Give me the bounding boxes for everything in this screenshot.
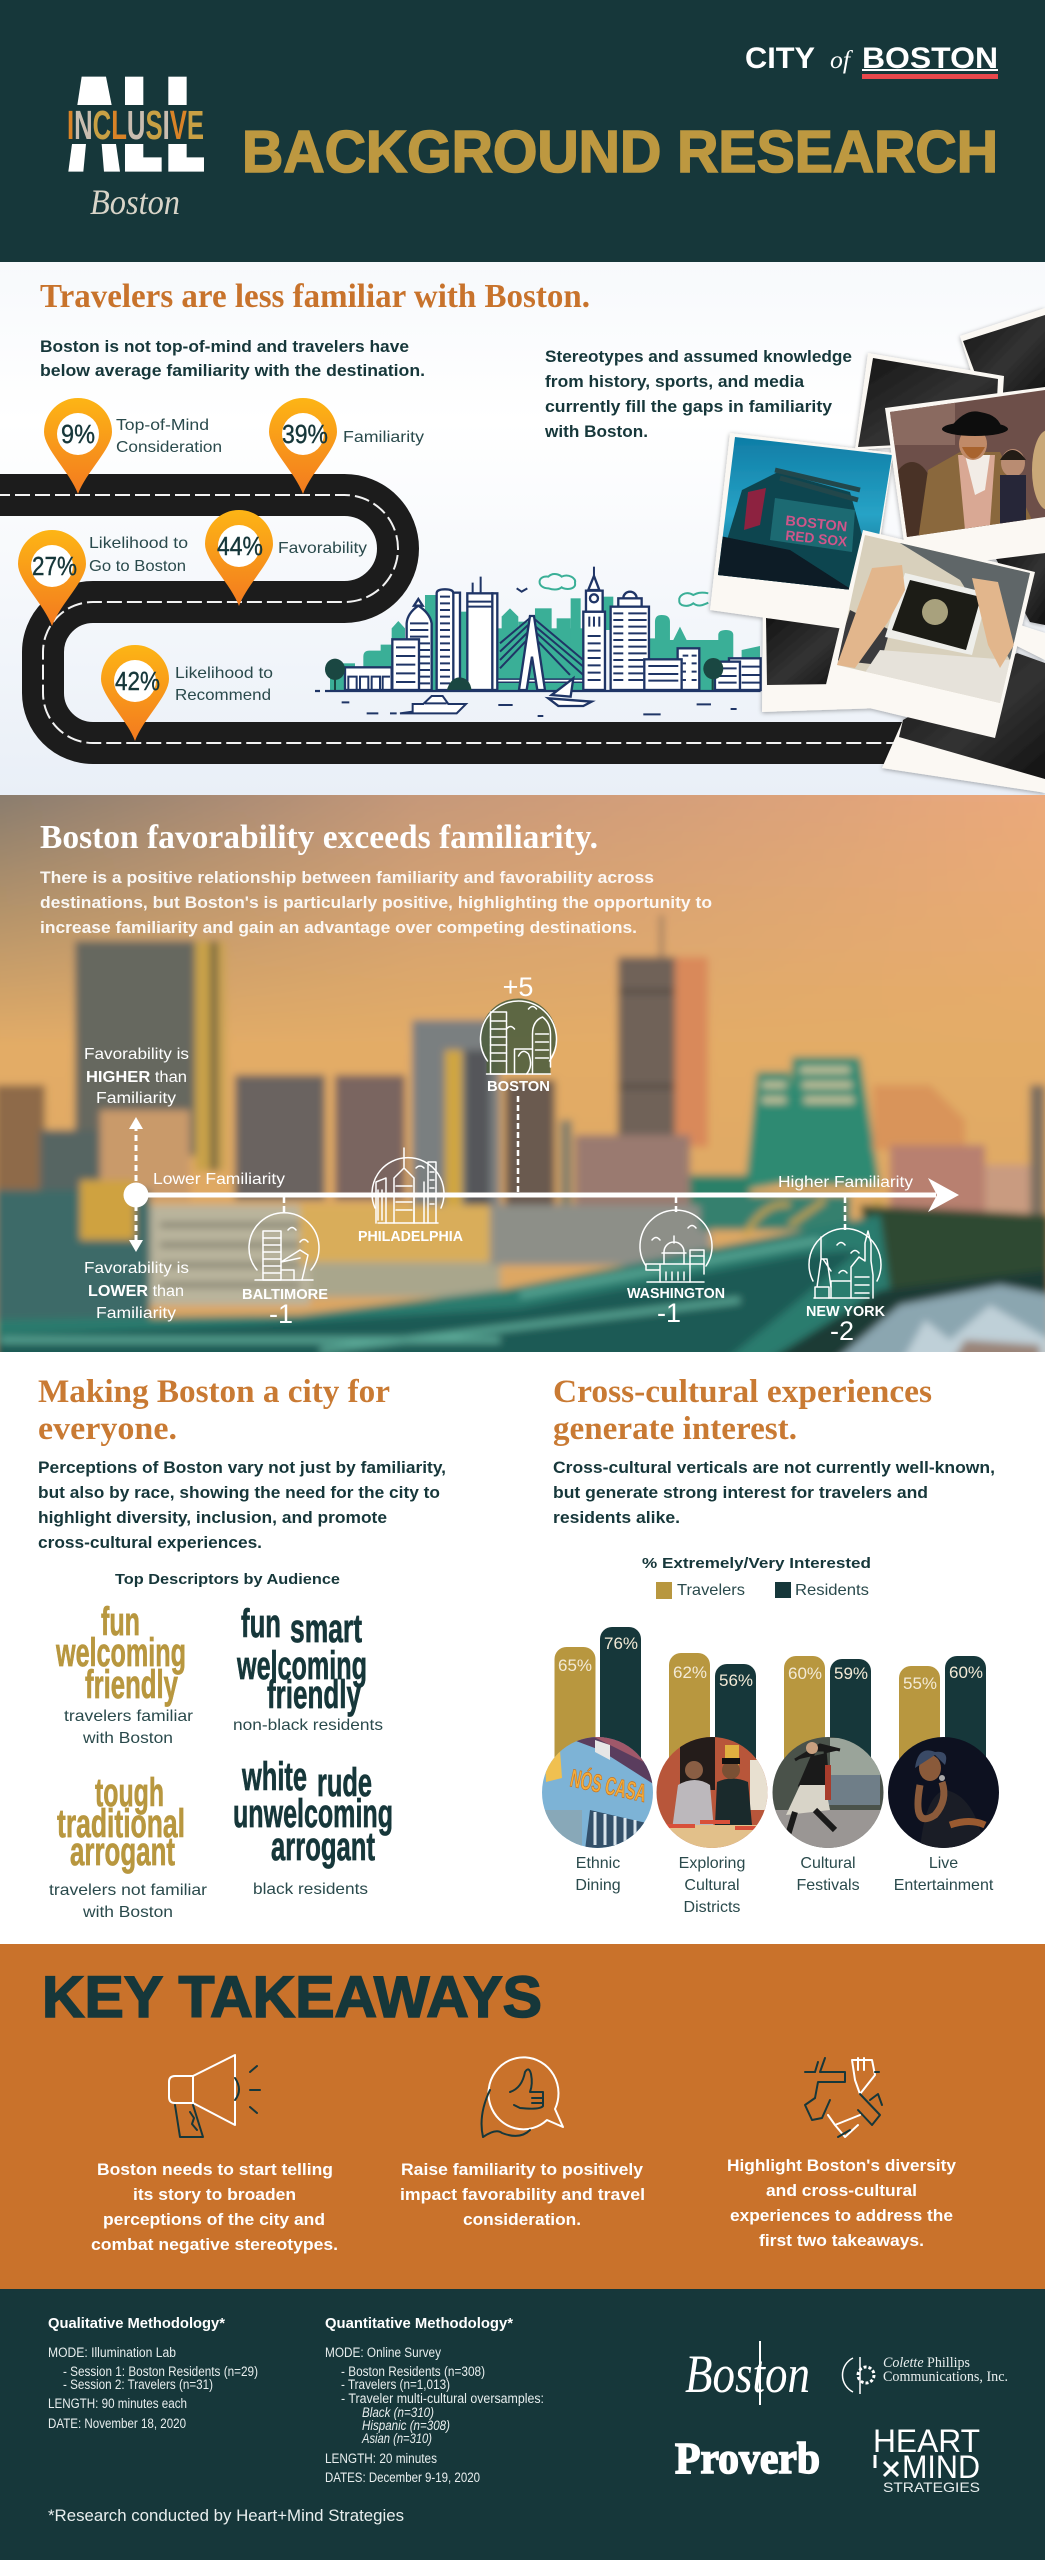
takeaway 1: Boston needs to start telling bbox=[97, 2160, 333, 2179]
logo: Colette Phillips Communications: Colette Phillips bbox=[883, 2355, 970, 2371]
pin: 39% familiarity bbox=[269, 398, 337, 494]
logo: City of Boston: CITY bbox=[745, 42, 815, 75]
icon: New York marker bbox=[806, 1229, 885, 1346]
intro text: increase familiarity and gain an advantage over competing destinations. bbox=[40, 918, 637, 937]
panel: cross-cultural experiences bbox=[542, 1379, 999, 1912]
polaroid: black back right bbox=[995, 553, 1045, 660]
qualitative methodology bbox=[48, 2315, 258, 2431]
heading bbox=[38, 1374, 390, 1447]
polaroid: Fenway Park: RED SOX bbox=[785, 527, 849, 550]
panel: key takeaways bbox=[0, 1944, 1045, 2289]
word cloud: non-black residents: welcoming bbox=[236, 1644, 367, 1688]
icon: Boston marker: BOSTON bbox=[487, 1078, 550, 1095]
heading: everyone. bbox=[38, 1411, 177, 1447]
legend: Travelers bbox=[677, 1582, 745, 1599]
panel: making Boston a city for everyone bbox=[0, 1352, 530, 1944]
icon: New York marker: -2 bbox=[830, 1316, 854, 1346]
horizontal familiarity axis arrow bbox=[124, 1178, 959, 1212]
stereotypes text: currently fill the gaps in familiarity bbox=[545, 397, 833, 416]
icon: Baltimore marker: BALTIMORE bbox=[242, 1286, 328, 1303]
chart title: % Extremely/Very Interested bbox=[642, 1555, 871, 1572]
axis end labels: Higher Familiarity bbox=[778, 1174, 913, 1191]
favorability higher label: HIGHER than bbox=[86, 1069, 187, 1086]
pin labels: Favorability bbox=[278, 540, 367, 557]
takeaway 3 bbox=[727, 2156, 957, 2250]
heading: Boston favorability exceeds familiarity. bbox=[40, 819, 598, 856]
icon: Philadelphia marker: PHILADELPHIA bbox=[358, 1228, 463, 1245]
pin: 27% likelihood to go: 27% bbox=[32, 551, 77, 581]
word cloud: travelers familiar: friendly bbox=[85, 1663, 178, 1707]
pin: 9% top-of-mind bbox=[44, 398, 112, 494]
icon: megaphone bbox=[169, 2055, 260, 2137]
qualitative methodology: DATE: November 18, 2020 bbox=[48, 2416, 186, 2431]
takeaway 1: combat negative stereotypes. bbox=[91, 2235, 338, 2254]
heading: Cross-cultural experiences bbox=[553, 1374, 932, 1410]
bar chart: 60% bbox=[949, 1663, 983, 1682]
icon: Washington marker: -1 bbox=[657, 1298, 681, 1328]
photo: live entertainment bbox=[885, 1735, 1000, 1850]
road bbox=[0, 495, 910, 743]
connector dashes bbox=[284, 1096, 845, 1230]
category labels: Cultural bbox=[800, 1855, 856, 1872]
category labels: Festivals bbox=[796, 1877, 860, 1894]
footnote: *Research conducted by Heart+Mind Strategies bbox=[48, 2506, 404, 2525]
stereotypes text bbox=[544, 347, 852, 441]
takeaway 3: Highlight Boston's diversity bbox=[727, 2156, 957, 2175]
word cloud: non-black residents bbox=[233, 1602, 383, 1734]
axis end labels: Lower Familiarity bbox=[153, 1171, 285, 1188]
pin: 9% top-of-mind: 9% bbox=[61, 419, 95, 449]
pin labels: Recommend bbox=[175, 687, 271, 704]
quantitative methodology: - Travelers (n=1,013) bbox=[341, 2377, 450, 2392]
quantitative methodology bbox=[325, 2315, 544, 2485]
pin labels: Go to Boston bbox=[89, 558, 186, 575]
icon: Boston marker bbox=[480, 972, 556, 1095]
quantitative methodology: LENGTH: 20 minutes bbox=[325, 2451, 437, 2466]
quantitative methodology: Hispanic (n=308) bbox=[362, 2418, 450, 2433]
bar chart: 56% bbox=[719, 1671, 753, 1690]
bar chart bbox=[554, 1627, 986, 1790]
favorability lower label bbox=[84, 1260, 189, 1322]
quantitative methodology: Black (n=310) bbox=[362, 2405, 434, 2420]
favorability lower label: Favorability is bbox=[84, 1260, 189, 1277]
intro text: There is a positive relationship between familiarity and favorability across bbox=[40, 868, 654, 887]
logo: Heart+Mind Strategies: STRATEGIES bbox=[883, 2479, 980, 2495]
logo: Colette Phillips Communications: Communications, Inc. bbox=[883, 2369, 1008, 2385]
pin labels: Familiarity bbox=[343, 429, 424, 446]
word cloud: travelers familiar: with Boston bbox=[82, 1730, 173, 1747]
photo: cultural festivals bbox=[770, 1735, 885, 1850]
body text bbox=[38, 1458, 446, 1552]
word cloud: black residents bbox=[233, 1755, 393, 1898]
heading bbox=[553, 1374, 932, 1447]
icon: joined hands bbox=[805, 2058, 882, 2137]
polaroid: Fenway Park bbox=[710, 433, 893, 632]
intro text: below average familiarity with the destination. bbox=[40, 361, 425, 380]
takeaway 2: impact favorability and travel bbox=[400, 2185, 645, 2204]
word cloud: travelers familiar: fun bbox=[101, 1600, 140, 1644]
pin: 39% familiarity: 39% bbox=[282, 419, 328, 449]
logo: Heart+Mind Strategies: MIND bbox=[902, 2449, 980, 2485]
takeaway 2 bbox=[400, 2160, 645, 2229]
polaroid: Fenway Park: BOSTON bbox=[785, 512, 848, 534]
intro text: destinations, but Boston's is particularly positive, highlighting the opportunity to bbox=[40, 893, 712, 912]
pin labels: Top-of-Mind bbox=[116, 417, 209, 434]
polaroid collage bbox=[710, 308, 1045, 793]
bar chart: 65% bbox=[558, 1656, 592, 1675]
header band bbox=[0, 0, 1045, 262]
favorability higher label: Familiarity bbox=[96, 1090, 176, 1107]
takeaway 1 bbox=[91, 2160, 338, 2254]
takeaway 1: its story to broaden bbox=[133, 2185, 296, 2204]
polaroid: black back top bbox=[960, 308, 1045, 400]
body text: cross-cultural experiences. bbox=[38, 1533, 262, 1552]
word cloud: black residents: black residents bbox=[253, 1881, 368, 1898]
quantitative methodology: MODE: Online Survey bbox=[325, 2345, 441, 2360]
favorability lower label: Familiarity bbox=[96, 1305, 176, 1322]
icon: New York marker: NEW YORK bbox=[806, 1303, 885, 1320]
legend: Residents bbox=[795, 1582, 869, 1599]
quantitative methodology: - Boston Residents (n=308) bbox=[341, 2364, 485, 2379]
pin: 42% likelihood to recommend bbox=[101, 645, 169, 741]
qualitative methodology: Qualitative Methodology* bbox=[48, 2315, 225, 2332]
word cloud: travelers familiar bbox=[55, 1600, 194, 1747]
logo: All Inclusive Boston: Boston bbox=[90, 182, 180, 222]
word cloud: travelers familiar: travelers familiar bbox=[64, 1708, 194, 1725]
icon: Baltimore marker bbox=[242, 1213, 328, 1329]
logo: City of Boston: BOSTON bbox=[862, 42, 998, 75]
pin: 44% favorability: 44% bbox=[217, 531, 263, 561]
qualitative methodology: MODE: Illumination Lab bbox=[48, 2345, 176, 2360]
heading: KEY TAKEAWAYS bbox=[42, 1965, 542, 2030]
word cloud: travelers not familiar: arrogant bbox=[70, 1830, 175, 1874]
stereotypes text: Stereotypes and assumed knowledge bbox=[545, 347, 852, 366]
panel: methodology footer bbox=[0, 2289, 1045, 2560]
category labels: Dining bbox=[575, 1877, 621, 1894]
pin labels: Consideration bbox=[116, 439, 222, 456]
word cloud: travelers familiar: welcoming bbox=[55, 1631, 186, 1675]
photo: ethnic dining: NÓS CASA bbox=[568, 1763, 649, 1808]
takeaway 2: consideration. bbox=[463, 2210, 581, 2229]
word cloud: black residents: unwelcoming bbox=[233, 1792, 393, 1836]
takeaway 2: Raise familiarity to positively bbox=[401, 2160, 644, 2179]
logo: All Inclusive Boston: INCLUSIVE bbox=[67, 102, 204, 148]
word cloud: non-black residents: non-black residents bbox=[233, 1717, 383, 1734]
bar chart: 76% bbox=[604, 1634, 638, 1653]
pin: 42% likelihood to recommend: 42% bbox=[115, 666, 160, 696]
word cloud: black residents: arrogant bbox=[271, 1825, 375, 1869]
polaroid: pirate reenactor bbox=[885, 385, 1045, 570]
stereotypes text: with Boston. bbox=[544, 422, 648, 441]
photo: exploring cultural districts bbox=[655, 1735, 770, 1850]
panel: travelers are less familiar bbox=[0, 262, 1045, 795]
body text: highlight diversity, inclusion, and promote bbox=[38, 1508, 387, 1527]
logo: All Inclusive Boston bbox=[67, 77, 204, 222]
favorability lower label: LOWER than bbox=[88, 1283, 184, 1300]
title: BACKGROUND RESEARCH bbox=[242, 119, 998, 185]
body text: but also by race, showing the need for the city to bbox=[38, 1483, 440, 1502]
category labels: Live bbox=[929, 1855, 958, 1872]
word cloud: travelers not familiar: tough bbox=[95, 1771, 164, 1815]
icon: Washington marker bbox=[627, 1210, 725, 1328]
category labels: Exploring bbox=[679, 1855, 745, 1872]
intro text: Boston is not top-of-mind and travelers have bbox=[40, 337, 409, 356]
icon: Baltimore marker: -1 bbox=[269, 1299, 293, 1329]
qualitative methodology: LENGTH: 90 minutes each bbox=[48, 2396, 187, 2411]
takeaway 3: first two takeaways. bbox=[759, 2231, 924, 2250]
takeaway 1: perceptions of the city and bbox=[103, 2210, 325, 2229]
favorability higher label: Favorability is bbox=[84, 1046, 189, 1063]
quantitative methodology: Quantitative Methodology* bbox=[325, 2315, 513, 2332]
logo: Proverb: Proverb bbox=[675, 2434, 820, 2483]
intro text bbox=[40, 868, 712, 937]
logo: Heart+Mind Strategies: HEART bbox=[873, 2423, 980, 2459]
word cloud: non-black residents: fun bbox=[241, 1602, 281, 1646]
logo: City of Boston: of bbox=[830, 47, 853, 74]
vertical favorability axis bbox=[129, 1117, 143, 1252]
panel: Boston favorability exceeds familiarity bbox=[0, 785, 1045, 1365]
takeaway 3: experiences to address the bbox=[730, 2206, 953, 2225]
polaroid: black back lower bbox=[762, 600, 882, 712]
pin labels bbox=[89, 417, 424, 704]
blurred skyline photo background bbox=[0, 785, 1045, 1365]
bar chart: 60% bbox=[788, 1664, 822, 1683]
word cloud: travelers not familiar: travelers not familiar bbox=[49, 1882, 208, 1899]
body text: Perceptions of Boston vary not just by familiarity, bbox=[38, 1458, 446, 1477]
logo: City of Boston bbox=[745, 42, 998, 79]
logo: Colette Phillips Communications bbox=[842, 2355, 1008, 2394]
icon: Boston marker: +5 bbox=[503, 972, 533, 1002]
pin: 44% favorability bbox=[205, 510, 273, 606]
category labels bbox=[575, 1855, 994, 1916]
icon: Philadelphia marker bbox=[358, 1148, 463, 1245]
bar chart: 55% bbox=[903, 1674, 937, 1693]
word cloud: black residents: rude bbox=[317, 1761, 372, 1805]
polaroid: black back middle bbox=[855, 353, 1004, 450]
axis end labels bbox=[153, 1171, 913, 1191]
word cloud: travelers not familiar bbox=[49, 1771, 208, 1921]
word cloud: non-black residents: friendly bbox=[267, 1673, 361, 1717]
qualitative methodology: - Session 1: Boston Residents (n=29) bbox=[63, 2364, 258, 2379]
heading: Making Boston a city for bbox=[38, 1374, 390, 1410]
takeaway 3: and cross-cultural bbox=[766, 2181, 917, 2200]
qualitative methodology: - Session 2: Travelers (n=31) bbox=[63, 2377, 213, 2392]
quantitative methodology: - Traveler multi-cultural oversamples: bbox=[341, 2391, 544, 2406]
logo: Heart+Mind Strategies bbox=[873, 2423, 980, 2495]
bar chart: 62% bbox=[673, 1663, 707, 1682]
pin labels: Likelihood to bbox=[175, 665, 273, 682]
body text: Cross-cultural verticals are not currently well-known, bbox=[553, 1458, 995, 1477]
category labels: Ethnic bbox=[576, 1855, 620, 1872]
skyline illustration bbox=[315, 567, 761, 716]
photo: ethnic dining bbox=[540, 1735, 655, 1850]
heading: Travelers are less familiar with Boston. bbox=[40, 278, 590, 315]
subheading: Top Descriptors by Audience bbox=[115, 1571, 340, 1588]
category labels: Cultural bbox=[684, 1877, 740, 1894]
bar chart: 59% bbox=[834, 1664, 868, 1683]
category labels: Districts bbox=[684, 1899, 740, 1916]
word cloud: travelers not familiar: with Boston bbox=[82, 1904, 173, 1921]
body text: but generate strong interest for travelers and bbox=[553, 1483, 928, 1502]
word cloud: black residents: white bbox=[241, 1755, 307, 1799]
category labels: Entertainment bbox=[894, 1877, 994, 1894]
body text bbox=[553, 1458, 995, 1527]
quantitative methodology: DATES: December 9-19, 2020 bbox=[325, 2470, 480, 2485]
pin: 27% likelihood to go bbox=[18, 530, 86, 626]
heading: generate interest. bbox=[553, 1411, 797, 1447]
favorability higher label bbox=[84, 1046, 189, 1107]
icon: Washington marker: WASHINGTON bbox=[627, 1285, 725, 1302]
intro text bbox=[40, 337, 425, 380]
stereotypes text: from history, sports, and media bbox=[545, 372, 805, 391]
quantitative methodology: Asian (n=310) bbox=[361, 2431, 432, 2446]
polaroid: bottom black bbox=[882, 653, 1045, 793]
logo: Boston script: Boston bbox=[685, 2344, 810, 2404]
icon: thumbs up speech bubble bbox=[482, 2057, 563, 2137]
word cloud: non-black residents: smart bbox=[290, 1607, 362, 1651]
pin labels: Likelihood to bbox=[89, 535, 188, 552]
legend bbox=[656, 1582, 869, 1599]
polaroid: tablet viewer bbox=[823, 530, 1040, 738]
word cloud: travelers not familiar: traditional bbox=[57, 1802, 185, 1846]
body text: residents alike. bbox=[553, 1508, 680, 1527]
